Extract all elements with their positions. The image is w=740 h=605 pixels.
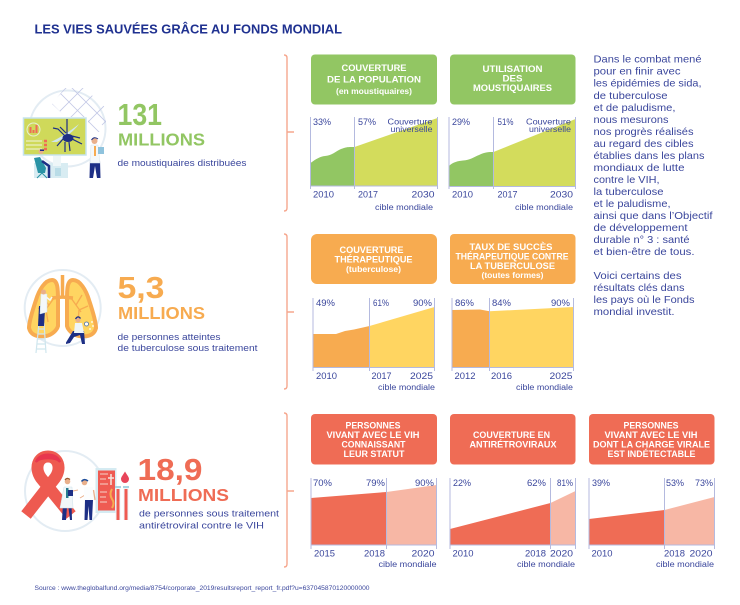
stat: 131 millions: MILLIONS <box>118 130 205 150</box>
stat: 18,9 millions: antirétroviral contre le VIH <box>139 520 264 532</box>
panel: taux de succès thérapeutique: THÉRAPEUTIQUE CONTRE <box>456 252 568 262</box>
chart: personnes connaissant leur statut: 79% <box>366 478 386 489</box>
text block: introduction: de tuberculose <box>594 90 668 102</box>
stat: 5,3 millions <box>118 270 258 354</box>
panel: personnes connaissant leur statut: CONNAISSANT <box>342 440 406 450</box>
panel: couverture de la population: (en moustiquaires) <box>336 87 412 96</box>
text block: introduction: les épidémies de sida, <box>594 78 702 90</box>
chart: personnes connaissant leur statut: 2020 <box>412 548 434 560</box>
chart: couverture de la population: universelle <box>390 125 433 134</box>
chart: charge virale indétectable: 2010 <box>592 548 612 560</box>
panel: charge virale indétectable: VIVANT AVEC LE VIH <box>604 430 698 440</box>
chart: couverture de la population: 2030 <box>412 190 434 200</box>
panel: couverture de la population <box>311 54 437 104</box>
panel: charge virale indétectable: PERSONNES <box>624 420 678 430</box>
text block: introduction: mondial investit. <box>594 306 674 318</box>
source: Source : www.theglobalfund.org/media/8754/corporate_2019resultsreport_report_fr.pdf?u=637045870120000000 <box>34 586 370 592</box>
chart: utilisation des moustiquaires <box>449 117 576 212</box>
chart: charge virale indétectable: 73% <box>695 478 714 489</box>
text block: introduction: mondiaux de lutte <box>594 162 685 174</box>
text block: introduction: contre le VIH, <box>594 174 660 186</box>
panel: couverture thérapeutique: (tuberculose) <box>346 265 401 274</box>
panel: utilisation des moustiquaires: MOUSTIQUAIRES <box>473 83 552 93</box>
panel: utilisation des moustiquaires: UTILISATION <box>482 64 542 74</box>
chart: couverture en antirétroviraux <box>450 478 576 569</box>
stat: 18,9 millions: 18,9 <box>138 452 202 487</box>
chart: couverture de la population: Couverture <box>388 118 433 126</box>
text block: introduction: durable n° 3 : santé <box>594 234 690 246</box>
chart: couverture en antirétroviraux: 22% <box>453 478 472 489</box>
panel: utilisation des moustiquaires <box>450 54 576 104</box>
stat: 5,3 millions: 5,3 <box>118 270 164 305</box>
chart: couverture thérapeutique: cible mondiale <box>378 383 436 392</box>
text block: introduction: pour en finir avec <box>594 66 680 78</box>
chart: charge virale indétectable: 53% <box>666 478 685 489</box>
panel: couverture en antirétroviraux <box>450 414 576 464</box>
chart: couverture de la population: 33% <box>313 117 332 128</box>
chart: couverture de la population: 2010 <box>313 190 334 200</box>
text block: introduction: la tuberculose <box>594 186 664 198</box>
chart: utilisation des moustiquaires: cible mondiale <box>515 203 574 212</box>
chart: personnes connaissant leur statut: 2018 <box>364 548 385 560</box>
panel: couverture en antirétroviraux: ANTIRÉTROVIRAUX <box>470 440 556 450</box>
chart: personnes connaissant leur statut: cible mondiale <box>378 560 437 569</box>
panel: charge virale indétectable: DONT LA CHARGE VIRALE <box>593 440 710 450</box>
icon: malaria research illustration <box>22 88 106 178</box>
panel: personnes connaissant leur statut: PERSONNES <box>346 420 400 430</box>
chart: utilisation des moustiquaires: 29% <box>452 117 471 128</box>
stat: 5,3 millions: MILLIONS <box>118 303 205 323</box>
chart: couverture thérapeutique: 61% <box>373 298 389 309</box>
bracket: HIV <box>284 413 294 567</box>
chart: couverture en antirétroviraux: cible mondiale <box>517 560 576 569</box>
panel: taux de succès thérapeutique <box>450 234 576 284</box>
chart: couverture thérapeutique <box>313 298 436 392</box>
chart: couverture de la population: cible mondiale <box>375 203 434 212</box>
chart: couverture en antirétroviraux: 2020 <box>550 548 573 560</box>
chart: couverture en antirétroviraux: 2010 <box>452 548 474 560</box>
chart: utilisation des moustiquaires: 2010 <box>452 190 473 200</box>
bracket: malaria <box>284 55 294 211</box>
panel: taux de succès thérapeutique: TAUX DE SUCCÈS <box>470 242 552 252</box>
panel: personnes connaissant leur statut: LEUR STATUT <box>344 449 405 459</box>
stat: 18,9 millions <box>138 452 279 532</box>
chart: taux de succès thérapeutique: 84% <box>492 298 512 309</box>
chart: taux de succès thérapeutique: 86% <box>455 298 475 309</box>
stat: 18,9 millions: MILLIONS <box>138 485 229 505</box>
text block: introduction: et de paludisme, <box>594 102 676 114</box>
icon: tuberculosis lungs illustration <box>25 270 101 353</box>
chart: couverture thérapeutique: 2025 <box>410 371 433 382</box>
chart: personnes connaissant leur statut <box>311 478 437 569</box>
chart: couverture de la population: 2017 <box>358 190 378 200</box>
chart: charge virale indétectable: 2020 <box>690 548 712 560</box>
chart: utilisation des moustiquaires: 51% <box>498 117 514 128</box>
text block: introduction: ainsi que dans l’Objectif <box>594 210 713 222</box>
stat: 18,9 millions: de personnes sous traitement <box>139 508 279 520</box>
panel: utilisation des moustiquaires: DES <box>502 74 522 84</box>
chart: couverture de la population: 57% <box>358 117 377 128</box>
chart: couverture de la population <box>310 117 438 212</box>
chart: couverture thérapeutique: 2010 <box>316 371 337 382</box>
chart: couverture thérapeutique: 49% <box>316 298 336 309</box>
chart: taux de succès thérapeutique: 2025 <box>550 371 572 382</box>
text block: introduction <box>594 54 713 318</box>
stat: 131 millions <box>118 97 247 169</box>
chart: couverture thérapeutique: 90% <box>413 298 433 309</box>
chart: charge virale indétectable: cible mondiale <box>656 560 715 569</box>
chart: taux de succès thérapeutique: 2016 <box>491 371 512 382</box>
panel: taux de succès thérapeutique: (toutes formes) <box>482 271 544 280</box>
text block: introduction: établies dans les plans <box>594 150 704 162</box>
chart: taux de succès thérapeutique: 2012 <box>454 371 476 382</box>
chart: personnes connaissant leur statut: 90% <box>415 478 435 489</box>
panel: charge virale indétectable <box>589 414 714 464</box>
panel: couverture en antirétroviraux: COUVERTURE EN <box>473 430 550 440</box>
bracket: tuberculosis <box>284 234 294 389</box>
text block: introduction: Dans le combat mené <box>594 54 702 66</box>
stat: 5,3 millions: de personnes atteintes <box>118 332 221 343</box>
chart: taux de succès thérapeutique <box>452 298 574 392</box>
chart: taux de succès thérapeutique: cible mondiale <box>516 383 574 392</box>
panel: charge virale indétectable: EST INDÉTECTABLE <box>608 449 696 459</box>
chart: personnes connaissant leur statut: 70% <box>313 478 333 489</box>
chart: couverture en antirétroviraux: 62% <box>527 478 547 489</box>
chart: couverture en antirétroviraux: 81% <box>557 478 573 489</box>
chart: charge virale indétectable: 39% <box>592 478 611 489</box>
text block: introduction: et le paludisme, <box>594 198 670 210</box>
title: LES VIES SAUVÉES GRÂCE AU FONDS MONDIAL <box>34 22 342 36</box>
panel: couverture thérapeutique <box>311 234 437 284</box>
text block: introduction: résultats clés dans <box>594 282 684 294</box>
chart: charge virale indétectable <box>589 478 715 569</box>
icon: HIV ribbon illustration <box>25 451 129 531</box>
chart: taux de succès thérapeutique: 90% <box>551 298 571 309</box>
chart: couverture thérapeutique: 2017 <box>372 371 392 382</box>
panel: couverture de la population: COUVERTURE <box>342 63 406 73</box>
chart: utilisation des moustiquaires: Couverture <box>526 118 572 126</box>
panel: personnes connaissant leur statut: VIVANT AVEC LE VIH <box>326 430 420 440</box>
chart: utilisation des moustiquaires: 2030 <box>550 190 573 200</box>
panel: couverture thérapeutique: THÉRAPEUTIQUE <box>334 254 412 264</box>
panel: taux de succès thérapeutique: LA TUBERCULOSE <box>470 261 555 271</box>
text block: introduction: Voici certains des <box>594 270 682 282</box>
text block: introduction: nous mesurons <box>594 114 668 126</box>
stat: 131 millions: de moustiquaires distribuées <box>118 158 247 169</box>
chart: charge virale indétectable: 2018 <box>664 548 685 560</box>
panel: couverture thérapeutique: COUVERTURE <box>340 245 404 255</box>
panel: personnes connaissant leur statut <box>311 414 437 464</box>
text block: introduction: au regard des cibles <box>594 138 694 150</box>
chart: couverture en antirétroviraux: 2018 <box>525 548 546 560</box>
text block: introduction: nos progrès réalisés <box>594 126 694 138</box>
stat: 5,3 millions: de tuberculose sous traitement <box>118 343 258 354</box>
panel: couverture de la population: DE LA POPULATION <box>327 74 421 84</box>
stat: 131 millions: 131 <box>118 97 162 132</box>
text block: introduction: de développement <box>594 222 688 234</box>
chart: utilisation des moustiquaires: 2017 <box>498 190 518 200</box>
text block: introduction: les pays où le Fonds <box>594 294 694 306</box>
chart: personnes connaissant leur statut: 2015 <box>314 548 335 560</box>
text block: introduction: et bien-être de tous. <box>594 246 694 258</box>
chart: utilisation des moustiquaires: universelle <box>529 125 572 134</box>
